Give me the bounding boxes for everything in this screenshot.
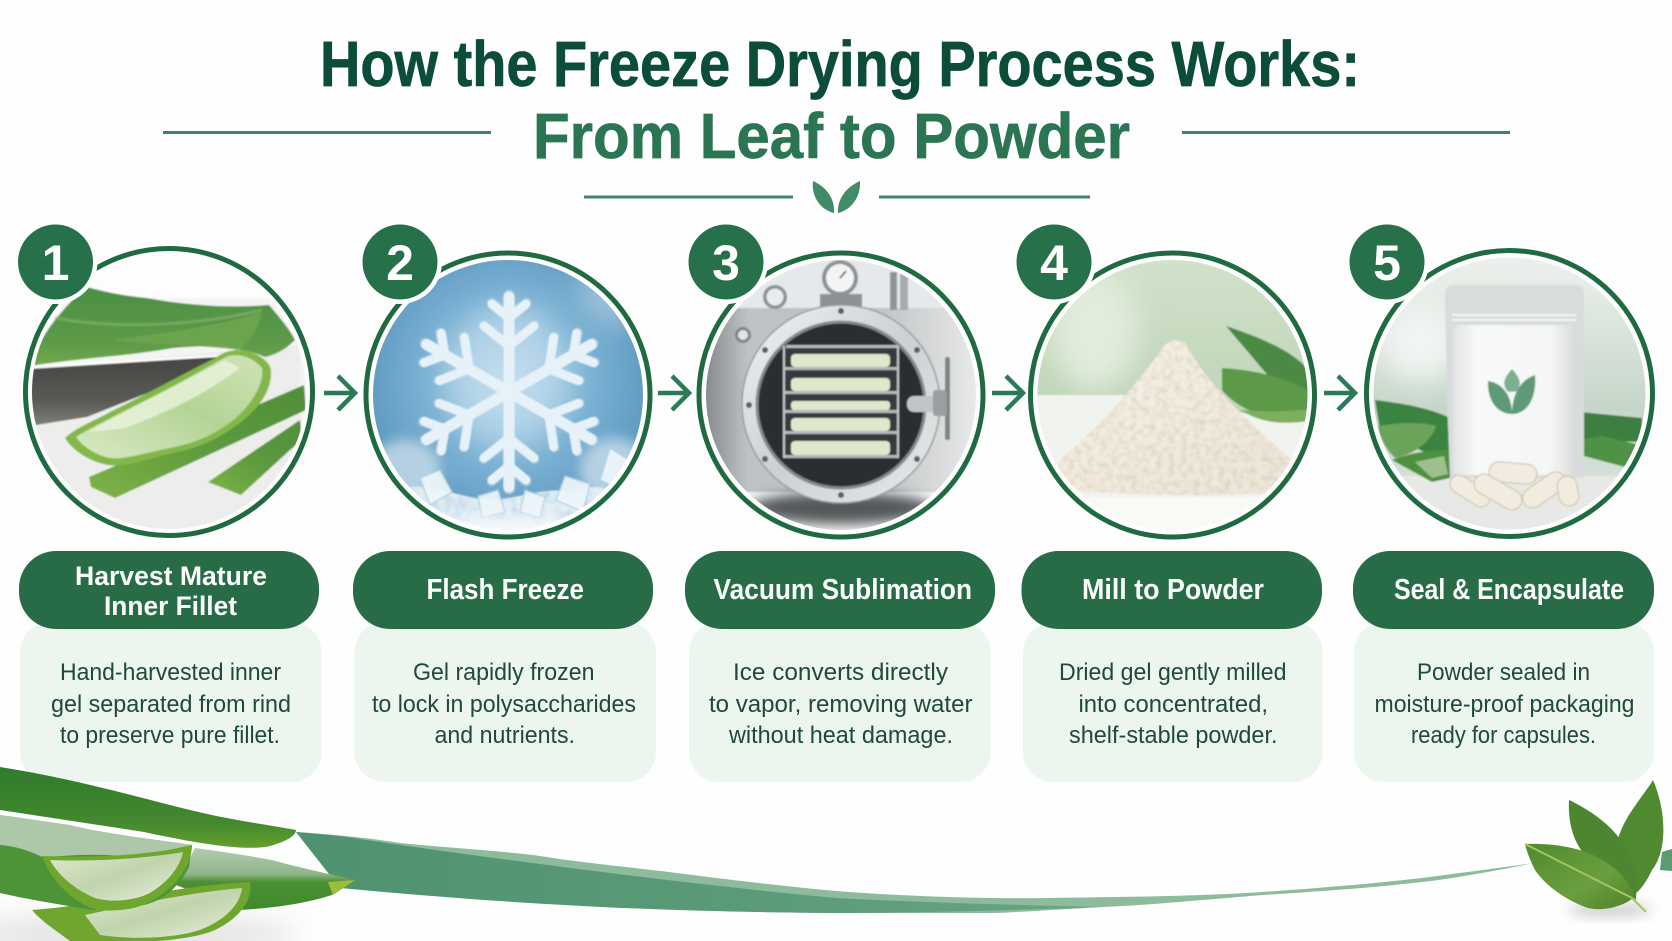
step 3 number badge: 3	[712, 235, 740, 291]
step 5 number badge	[1345, 220, 1429, 304]
aloe leaves behind pile	[1222, 326, 1315, 423]
pouch leaf logo	[1488, 369, 1535, 414]
step 4 number badge: 4	[1040, 235, 1068, 291]
description text: Ice converts directly	[733, 659, 948, 686]
title rules	[163, 131, 1510, 198]
step 5 image: pouch and capsules	[1374, 258, 1646, 530]
pill heading: Inner Fillet	[104, 591, 237, 621]
step 4 image: powder pile	[1038, 260, 1308, 498]
icon: twin leaf ornament	[813, 181, 860, 213]
title pill	[19, 551, 319, 629]
pill heading: Mill to Powder	[1082, 574, 1264, 606]
description card	[354, 622, 656, 782]
step 3 text panel	[685, 551, 995, 782]
pill heading	[75, 561, 267, 621]
description card	[689, 622, 990, 782]
title line one: How the Freeze Drying Process Works:	[320, 28, 1360, 100]
description text: without heat damage.	[728, 722, 953, 749]
step 1 number badge	[14, 220, 98, 304]
middle leaf	[176, 848, 355, 910]
step 5 ring	[1366, 250, 1652, 536]
description text: Powder sealed in	[1417, 659, 1590, 686]
description text: to preserve pure fillet.	[60, 722, 280, 749]
description text: Hand-harvested inner	[60, 659, 281, 686]
description text	[372, 659, 636, 749]
tea leaves, bottom right	[1525, 780, 1672, 917]
description text: into concentrated,	[1078, 691, 1268, 718]
pill heading: Harvest Mature	[75, 561, 267, 591]
pill heading: Seal & Encapsulate	[1394, 574, 1624, 606]
pill heading: Vacuum Sublimation	[714, 574, 972, 606]
description text: moisture-proof packaging	[1374, 691, 1634, 718]
door handle	[907, 357, 950, 440]
front leaf	[1525, 844, 1633, 909]
aloe leaves right	[1580, 412, 1642, 467]
step 4 ring	[1030, 253, 1314, 537]
title pill	[685, 551, 995, 629]
step 3 image: vacuum freeze dryer	[706, 260, 976, 530]
step 3 number badge	[684, 220, 768, 304]
description text	[1059, 659, 1286, 749]
title pill	[1022, 551, 1322, 629]
step 1 ring	[26, 248, 312, 536]
step 3 ring	[699, 253, 983, 537]
description card	[1354, 622, 1654, 782]
description text: to lock in polysaccharides	[372, 691, 636, 718]
title	[320, 28, 1360, 172]
title pill	[353, 551, 653, 629]
drying trays	[783, 345, 899, 458]
front cut leaf	[0, 815, 192, 910]
title line two: From Leaf to Powder	[533, 100, 1130, 172]
arrow 4 to 5	[1324, 376, 1355, 410]
aloe leaves left	[1375, 400, 1450, 482]
capsules	[1447, 461, 1580, 514]
step 2 ring	[366, 253, 650, 537]
arrow 3 to 4	[992, 376, 1023, 410]
title pill	[1353, 551, 1654, 629]
pouch	[1445, 285, 1584, 478]
step 4 text panel	[1022, 551, 1322, 782]
description text: Gel rapidly frozen	[413, 659, 594, 686]
step 1 image: cutting aloe fillet	[32, 286, 306, 529]
gauges and pipes	[735, 260, 908, 343]
step 5 text panel	[1353, 551, 1654, 782]
description text	[51, 659, 291, 749]
right ribbon stub	[1660, 849, 1672, 871]
description text: gel separated from rind	[51, 691, 291, 718]
description text: Dried gel gently milled	[1059, 659, 1286, 686]
aloe cut leaves, bottom left	[0, 767, 355, 941]
description card	[1023, 622, 1322, 782]
step 5 number badge: 5	[1373, 235, 1401, 291]
back leaf	[0, 767, 296, 848]
pill heading: Flash Freeze	[426, 574, 584, 606]
arrow 1 to 2	[324, 376, 355, 410]
description text: ready for capsules.	[1411, 722, 1596, 749]
step 1 text panel	[19, 551, 322, 782]
description card	[20, 622, 322, 782]
step 4 number badge	[1012, 220, 1096, 304]
green swoosh ribbon	[296, 832, 1534, 913]
description text	[1374, 659, 1634, 749]
left upright leaf	[1569, 800, 1636, 900]
description text: to vapor, removing water	[709, 691, 973, 718]
step 2 number badge: 2	[386, 235, 414, 291]
description text: shelf-stable powder.	[1069, 722, 1278, 749]
lower cut slice	[32, 882, 250, 941]
description text: and nutrients.	[434, 722, 575, 749]
step 2 text panel	[353, 551, 656, 782]
description text	[709, 659, 973, 749]
step 1 number badge: 1	[42, 235, 69, 291]
step 2 number badge	[358, 220, 442, 304]
arrow 2 to 3	[658, 376, 689, 410]
step 2 image: snowflake and ice	[373, 260, 643, 530]
right upright leaf	[1618, 780, 1663, 893]
